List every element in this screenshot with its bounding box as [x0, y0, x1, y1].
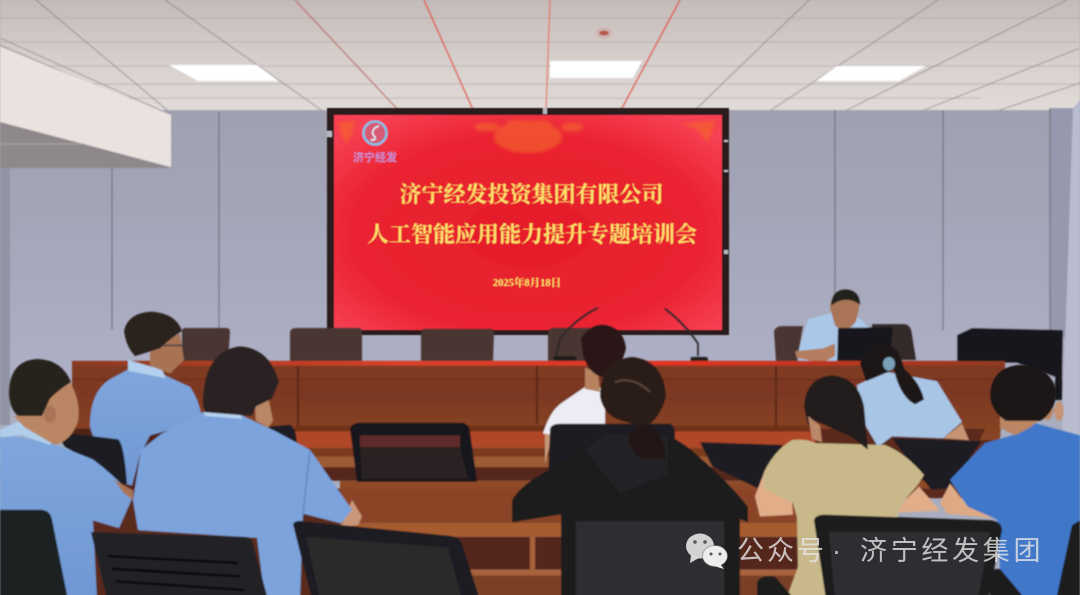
person: man centre foreground — [133, 346, 362, 595]
watermark — [686, 534, 1044, 569]
company logo — [353, 122, 397, 164]
person: woman with black hoodie — [512, 357, 748, 522]
small chair behind centre man — [267, 425, 297, 443]
laptop — [837, 327, 893, 366]
chair far right edge — [1056, 520, 1080, 595]
chair foreground right — [757, 515, 1026, 595]
person: man with glasses (back left) — [90, 312, 202, 486]
presenter — [795, 289, 870, 364]
ceiling lights — [169, 61, 926, 81]
left ceiling soffit — [0, 47, 171, 168]
chair foreground far left — [0, 510, 68, 595]
person: man in blue polo — [940, 365, 1080, 595]
company logo: 济宁经发 — [353, 150, 397, 164]
watermark text: 公众号 — [737, 536, 827, 566]
back wall — [0, 108, 1080, 425]
smoke detector — [595, 27, 613, 39]
screen surface — [334, 115, 722, 330]
screen ornaments — [338, 120, 716, 153]
chair right — [892, 438, 981, 489]
right column — [1062, 100, 1080, 440]
floor and shadow behind furniture — [72, 426, 1000, 595]
watermark text: 济宁经发集团 — [860, 536, 1044, 566]
chair behind hoodie woman — [548, 424, 675, 479]
person: woman in beige dress — [755, 375, 940, 595]
chair foreground centre — [561, 509, 740, 595]
screen frame reflections — [327, 108, 728, 254]
chair foreground centre left — [293, 521, 480, 595]
screen date: 2025年8月18日 — [493, 276, 561, 289]
back table — [72, 361, 1005, 440]
screen title line 1: 济宁经发投资集团有限公司 — [399, 182, 664, 207]
second table — [295, 426, 815, 481]
person: woman in white shirt — [543, 325, 626, 464]
chair centre left — [350, 423, 477, 482]
chair centre right — [700, 442, 783, 489]
third table — [340, 481, 940, 595]
projection screen — [327, 108, 729, 335]
person: woman in light blue shirt — [857, 344, 969, 447]
watermark text: · — [832, 536, 841, 566]
chair foreground left — [91, 532, 268, 595]
microphones — [553, 308, 710, 365]
screen frame — [327, 108, 729, 335]
cabinet on right — [957, 328, 1063, 400]
back row chairs — [182, 324, 916, 362]
mid-row chairs — [350, 423, 981, 489]
chair behind left man — [62, 433, 127, 486]
ceiling — [0, 0, 1080, 232]
person: man left foreground — [0, 359, 133, 595]
icon: wechat bubbles — [686, 534, 728, 569]
screen title line 2: 人工智能应用能力提升专题培训会 — [367, 222, 697, 247]
